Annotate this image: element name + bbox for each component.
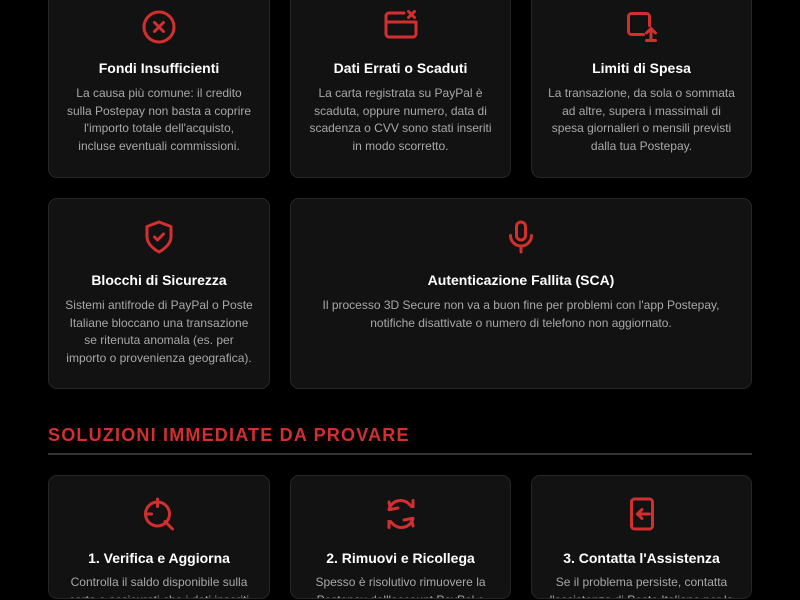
text: ad altre, supera i massimali di bbox=[562, 104, 721, 118]
text: dalla tua Postepay. bbox=[591, 139, 692, 153]
text: in modo scorretto. bbox=[352, 139, 449, 153]
icon: refresh bbox=[388, 499, 414, 529]
title: Limiti di Spesa bbox=[592, 60, 691, 76]
card: blocchi di sicurezza bbox=[48, 198, 270, 389]
text: scadenza o CVV sono stati inseriti bbox=[309, 121, 492, 135]
text bbox=[315, 575, 486, 599]
text: scaduta, oppure numero, data di bbox=[314, 104, 487, 118]
card: dati errati bbox=[290, 0, 511, 178]
text: sulla Postepay non basta a coprire bbox=[67, 104, 251, 118]
card: rimuovi bbox=[290, 475, 511, 599]
card: autenticazione fallita bbox=[290, 198, 752, 389]
text bbox=[548, 86, 735, 153]
icon: x circle bbox=[142, 10, 176, 44]
text bbox=[322, 298, 719, 330]
card: contatta bbox=[531, 475, 752, 599]
icon: shield check bbox=[146, 220, 172, 254]
text: Controlla il saldo disponibile sulla bbox=[71, 575, 247, 589]
text: Italiane bloccano una transazione bbox=[70, 316, 248, 330]
title: 1. Verifica e Aggiorna bbox=[88, 550, 230, 566]
title: Fondi Insufficienti bbox=[99, 60, 219, 76]
text: Sistemi antifrode di PayPal o Poste bbox=[65, 298, 253, 312]
text: La transazione, da sola o sommata bbox=[548, 86, 735, 100]
title: 3. Contatta l'Assistenza bbox=[563, 550, 720, 566]
text: spesa giornalieri o mensili previsti bbox=[552, 121, 731, 135]
text bbox=[65, 298, 253, 365]
text: Il processo 3D Secure non va a buon fine per problemi con l'app Postepay, bbox=[322, 298, 719, 312]
text bbox=[67, 86, 251, 153]
title: 2. Rimuovi e Ricollega bbox=[326, 550, 475, 566]
text bbox=[69, 575, 249, 599]
text: La carta registrata su PayPal è bbox=[318, 86, 483, 100]
text: se ritenuta anomala (es. per bbox=[84, 333, 234, 347]
heading: soluzioni: SOLUZIONI IMMEDIATE DA PROVARE bbox=[48, 425, 410, 445]
text: l'importo totale dell'acquisto, bbox=[84, 121, 234, 135]
title: Dati Errati o Scaduti bbox=[334, 60, 467, 76]
card: verifica bbox=[48, 475, 270, 599]
text: Spesso è risolutivo rimuovere la bbox=[315, 575, 486, 589]
text: incluse eventuali commissioni. bbox=[78, 139, 240, 153]
icon: card x bbox=[384, 10, 418, 38]
text: Se il problema persiste, contatta bbox=[556, 575, 727, 589]
text bbox=[550, 575, 733, 599]
text: La causa più comune: il credito bbox=[76, 86, 242, 100]
icon: microphone bbox=[509, 220, 533, 254]
text: notifiche disattivate o numero di telefono non aggiornato. bbox=[370, 316, 672, 330]
text: importo o provenienza geografica). bbox=[66, 351, 252, 365]
text bbox=[309, 86, 492, 153]
icon: square arrow bbox=[627, 12, 658, 42]
card: fondi insufficienti bbox=[48, 0, 270, 178]
icon: door arrow bbox=[630, 498, 654, 530]
title: Blocchi di Sicurezza bbox=[91, 272, 227, 288]
card: limiti di spesa bbox=[531, 0, 752, 178]
title: Autenticazione Fallita (SCA) bbox=[428, 272, 614, 288]
icon: search target bbox=[144, 498, 174, 531]
